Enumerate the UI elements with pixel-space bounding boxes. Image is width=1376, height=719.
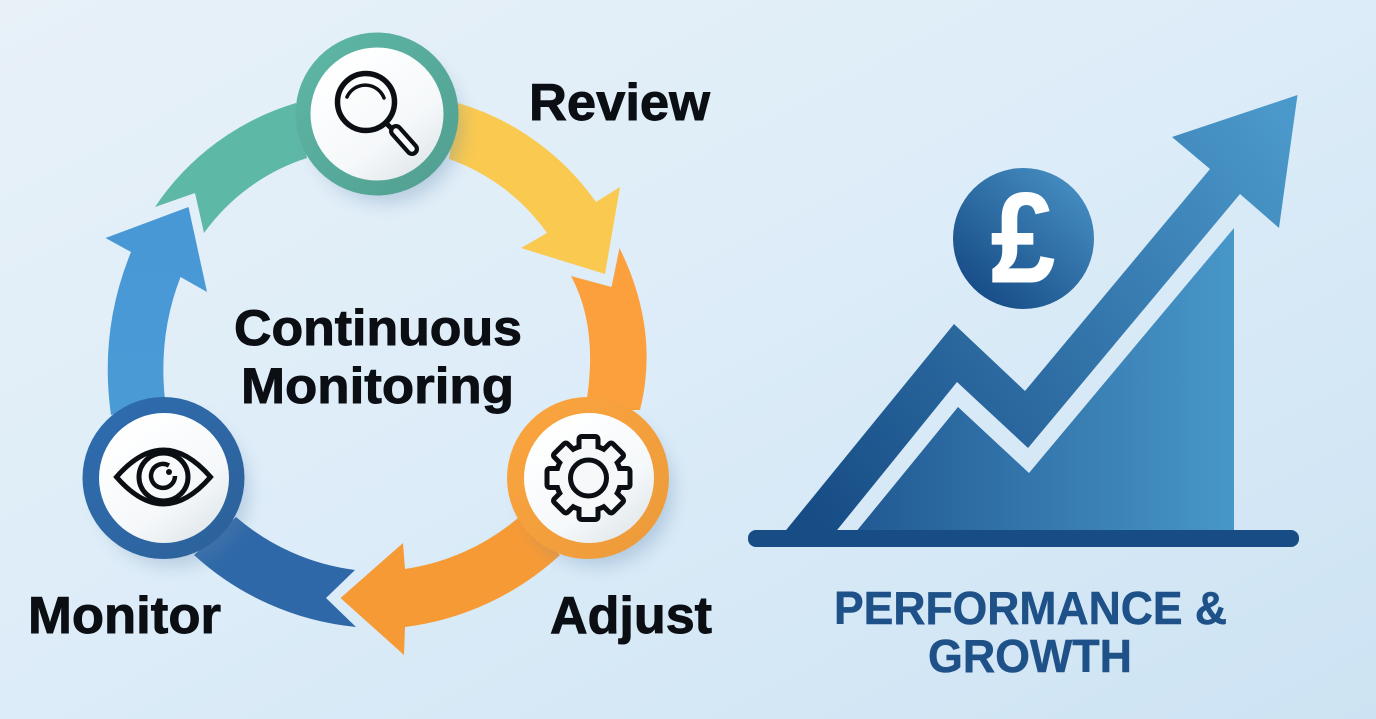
growth chart <box>748 95 1299 682</box>
pound coin: £ <box>991 167 1055 310</box>
arrow: monitor to review (light blue) <box>106 207 207 415</box>
arc: monitor (dark blue) <box>194 517 356 627</box>
icon: eye <box>116 450 210 504</box>
node: adjust <box>507 397 669 559</box>
pound coin <box>953 167 1094 310</box>
cycle diagram <box>28 32 712 655</box>
chart caption: GROWTH <box>928 630 1132 682</box>
node: review <box>296 32 458 196</box>
arrow: review incoming (teal) <box>155 103 307 233</box>
center title <box>234 300 522 414</box>
icon: magnifying glass <box>338 74 412 149</box>
node: monitor <box>82 397 244 559</box>
label: review: Review <box>529 74 711 132</box>
arrow: review to adjust (yellow) <box>449 103 620 274</box>
area under the line <box>858 228 1234 535</box>
center title: Monitoring <box>241 358 514 414</box>
icon: gear <box>550 439 628 517</box>
chart caption: PERFORMANCE & <box>834 582 1227 634</box>
chart caption <box>834 582 1227 682</box>
label: monitor: Monitor <box>28 587 221 645</box>
arrow: adjust to monitor (orange) <box>340 518 560 655</box>
node shadows <box>98 51 673 566</box>
baseline <box>748 530 1299 547</box>
center title: Continuous <box>234 300 522 356</box>
label: adjust: Adjust <box>550 587 712 645</box>
growth arrow <box>784 95 1298 532</box>
arc: adjust (orange, right side) <box>571 248 647 410</box>
